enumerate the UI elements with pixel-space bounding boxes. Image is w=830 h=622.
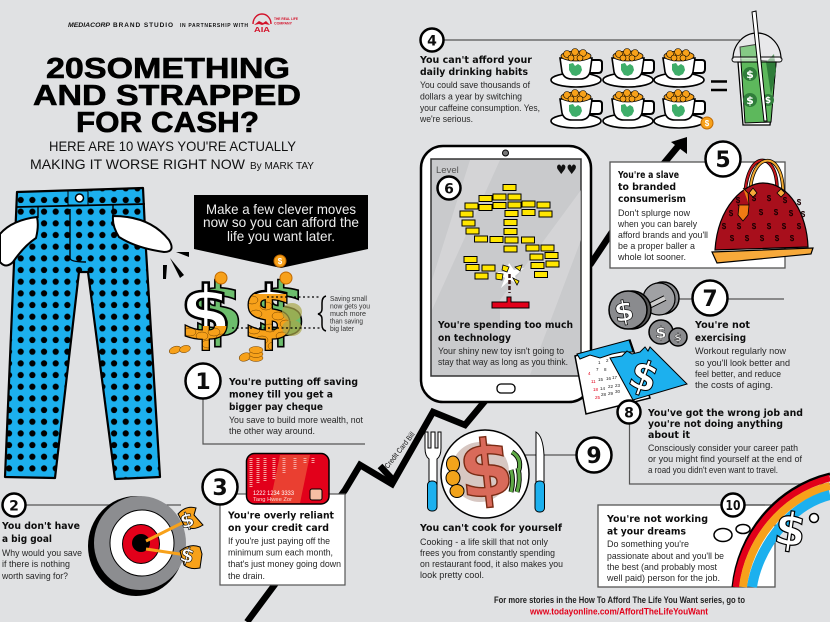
icon: dollar signs filling with coins bbox=[168, 268, 306, 363]
icon: calendar and torn dollar page: 18 bbox=[593, 387, 599, 392]
header: partner logos: COMPANY bbox=[274, 20, 292, 26]
panel: tip 5 branded consumerism: 5 bbox=[715, 148, 731, 173]
icon: dollar signs filling with coins: $ bbox=[255, 268, 306, 354]
panel: tip 5 branded consumerism: whole lot sooner. bbox=[617, 252, 686, 263]
panel: tip 1 saving bbox=[186, 364, 365, 444]
panel: tip 1 saving: You save to build more wealth, not bbox=[229, 415, 363, 426]
icon: dollar signs filling with coins: $ bbox=[192, 268, 244, 354]
panel: tip 3 credit card: You're overly reliant bbox=[227, 510, 334, 522]
icon: red credit card bbox=[246, 454, 329, 504]
icon: target with dollar darts bbox=[88, 496, 203, 596]
icon: red designer handbag: $ bbox=[774, 208, 779, 217]
icon: red credit card: Tang Hwee Zor bbox=[253, 497, 292, 503]
icon: calendar and torn dollar page: 28 bbox=[601, 392, 607, 397]
panel: tip 10 dreams: You're not working bbox=[606, 514, 708, 525]
panel: tip 5 branded consumerism: consumerism bbox=[618, 194, 686, 205]
icon: calendar and torn dollar page: 25 bbox=[595, 395, 601, 400]
icon: plate with dollar steak, fork and knife: $ bbox=[454, 422, 518, 518]
game: yellow bricks bbox=[460, 184, 559, 279]
panel: tip 7 exercising: the costs of aging. bbox=[695, 380, 773, 391]
panel: tip 3 credit card: that's just money going down bbox=[228, 559, 341, 570]
panel: tip 3 credit card: If you're just paying off the bbox=[228, 536, 330, 547]
panel: tip 7 exercising: so you'll look better and bbox=[695, 358, 790, 369]
subtitle and byline: By MARK TAY bbox=[250, 160, 314, 172]
icon: red designer handbag: $ bbox=[722, 222, 727, 231]
icon: calendar and torn dollar page: 22 bbox=[608, 384, 614, 389]
panel: tip 1 saving: 1 bbox=[195, 370, 211, 395]
icon: red designer handbag: $ bbox=[775, 234, 780, 243]
icon: calendar and torn dollar page: 17 bbox=[612, 375, 618, 380]
panel: tip 1 saving: bigger pay cheque bbox=[229, 402, 323, 413]
illustration: empty-pocket jeans bbox=[0, 188, 189, 479]
annotation: saving small bracket: big later bbox=[330, 326, 355, 333]
header: partner logos: THE REAL LIFE bbox=[274, 16, 298, 21]
footer: more stories link: For more stories in the How To Afford The Life You Want series, go to bbox=[494, 595, 745, 606]
subtitle and byline bbox=[30, 138, 314, 172]
icon: calendar and torn dollar page: 30 bbox=[615, 389, 621, 394]
panel: tip 9 cooking: on restaurant food, it also makes you bbox=[420, 559, 563, 570]
icon: red designer handbag: $ bbox=[752, 222, 757, 231]
panel: tip 7 exercising bbox=[609, 280, 790, 391]
panel: tip 4 drinking habits: 4 bbox=[427, 34, 437, 50]
panel: tip 7 exercising: 7 bbox=[702, 287, 718, 312]
icon: red designer handbag: $ bbox=[729, 209, 734, 218]
icon: dollar signs filling with coins: $ bbox=[180, 271, 232, 357]
panel: tip 1 saving: the other way around. bbox=[229, 426, 315, 437]
icon: red designer handbag: $ bbox=[801, 210, 806, 219]
panel: tip 4 drinking habits bbox=[419, 28, 740, 125]
icon: calendar and torn dollar page: 11 bbox=[591, 379, 596, 384]
panel: tip 3 credit card: minimum sum each month, bbox=[228, 548, 333, 558]
icon: calendar and torn dollar page: 29 bbox=[608, 391, 614, 396]
panel: tip 7 exercising: feel better, and reduce bbox=[695, 369, 781, 380]
panel: tip 6 tablet game: You're spending too much bbox=[437, 320, 573, 331]
label: credit card bill: Credit Card Bill bbox=[382, 430, 417, 470]
annotation: saving small bracket bbox=[232, 296, 370, 333]
icon: red designer handbag: $ bbox=[797, 198, 802, 207]
icon: calendar and torn dollar page: 14 bbox=[600, 386, 606, 391]
icon: six coffee cups full of coins bbox=[551, 48, 713, 129]
icon: red credit card: 1222 1234 3333 bbox=[253, 491, 295, 497]
panel: tip 3 credit card: on your credit card bbox=[228, 523, 329, 534]
icon: calendar and torn dollar page: 7 bbox=[596, 367, 599, 372]
panel: tip 6 tablet game: ♥♥ bbox=[556, 163, 577, 178]
callout: make a few clever moves: now so you can afford the bbox=[203, 214, 359, 230]
panel: tip 5 branded consumerism: You're a slave bbox=[617, 170, 679, 181]
panel: tip 7 exercising: You're not bbox=[694, 320, 750, 331]
icon: calendar and torn dollar page: 16 bbox=[606, 376, 612, 381]
icon: target with dollar darts: $ bbox=[177, 507, 197, 533]
equals sign bbox=[711, 82, 727, 90]
panel: tip 5 branded consumerism: afford brands and you'll bbox=[618, 230, 708, 241]
icon: red designer handbag: $ bbox=[737, 222, 742, 231]
panel: tip 9 cooking bbox=[419, 422, 612, 581]
icon: red designer handbag: $ bbox=[797, 222, 802, 231]
header: partner logos: AIA bbox=[254, 27, 270, 34]
icon: calendar and torn dollar page: 8 bbox=[604, 367, 607, 372]
panel: tip 4 drinking habits: we're serious. bbox=[419, 114, 473, 125]
icon: red designer handbag: $ bbox=[760, 234, 765, 243]
panel: tip 2 big goal: 2 bbox=[9, 498, 19, 514]
icon: calendar and torn dollar page: 2 bbox=[606, 358, 609, 363]
game: paddle and explosion bbox=[492, 263, 529, 308]
panel: tip 8 wrong job: about it bbox=[648, 430, 690, 441]
panel: tip 4 drinking habits: your caffeine consumption. Yes, bbox=[420, 103, 540, 114]
icon: six coffee cups full of coins: $ bbox=[705, 119, 710, 128]
icon: dumbbell with dollar coins: $ bbox=[674, 331, 682, 344]
panel: tip 5 branded consumerism bbox=[610, 142, 813, 268]
annotation: saving small bracket: much more bbox=[330, 311, 366, 318]
icon: falling coin bbox=[274, 255, 286, 267]
icon: red designer handbag: $ bbox=[767, 194, 772, 203]
panel: tip 3 credit card: 3 bbox=[212, 476, 228, 501]
footer: more stories link bbox=[494, 595, 745, 618]
panel: tip 9 cooking: Cooking - a life skill that not only bbox=[420, 537, 548, 548]
footer: more stories link: www.todayonline.com/AffordTheLifeYouWant bbox=[529, 606, 709, 618]
panel: tip 9 cooking: 9 bbox=[586, 444, 602, 469]
panel: tip 4 drinking habits: You can't afford your bbox=[419, 55, 532, 66]
annotation: saving small bracket: now gets you bbox=[330, 304, 370, 310]
header: partner logos bbox=[68, 14, 298, 34]
panel: tip 7 exercising: exercising bbox=[695, 333, 746, 344]
panel: tip 2 big goal: a big goal bbox=[2, 534, 52, 545]
panel: tip 3 credit card: the drain. bbox=[228, 571, 265, 582]
panel: tip 6 tablet game: Level bbox=[436, 165, 459, 176]
icon: red designer handbag: $ bbox=[736, 196, 741, 205]
icon: bubble tea cup full of cash: $ bbox=[746, 68, 754, 81]
icon: calendar and torn dollar page: 15 bbox=[598, 377, 604, 382]
icon: rainbow with dollar and clouds bbox=[714, 474, 830, 587]
panel: tip 4 drinking habits: You could save thousands of bbox=[420, 80, 530, 91]
icon: calendar and torn dollar page: 1 bbox=[598, 360, 601, 365]
panel: tip 6 tablet game: Your shiny new toy isn't going to bbox=[438, 346, 564, 357]
icon: red designer handbag: $ bbox=[730, 234, 735, 243]
icon: target with dollar darts: $ bbox=[177, 542, 197, 568]
zigzag debt line and arrow bbox=[247, 137, 687, 622]
header: partner logos: BRAND STUDIO bbox=[113, 22, 173, 29]
panel: tip 9 cooking: You can't cook for yourself bbox=[419, 523, 563, 534]
panel: tip 8 wrong job: you're not doing anything bbox=[648, 419, 783, 430]
icon: calendar and torn dollar page: 4 bbox=[588, 371, 591, 376]
panel: tip 6 tablet game: on technology bbox=[438, 333, 511, 344]
panel: tip 8 wrong job: You've got the wrong job and bbox=[647, 408, 803, 419]
panel: tip 8 wrong job: Consciously consider your career path bbox=[648, 443, 798, 454]
icon: dumbbell with dollar coins bbox=[609, 282, 687, 346]
panel: tip 3 credit card bbox=[202, 454, 345, 585]
callout: make a few clever moves: life you want later. bbox=[227, 228, 335, 244]
icon: calendar and torn dollar page: 23 bbox=[615, 383, 621, 388]
panel: tip 2 big goal: if there is nothing bbox=[2, 559, 70, 570]
icon: calendar and torn dollar page bbox=[575, 340, 687, 414]
annotation: saving small bracket: than saving bbox=[330, 318, 363, 326]
panel: tip 9 cooking: look pretty cool. bbox=[420, 570, 484, 581]
panel: tip 4 drinking habits: dollars a year by switching bbox=[420, 92, 522, 102]
icon: red designer handbag: $ bbox=[783, 196, 788, 205]
icon: red designer handbag: $ bbox=[759, 208, 764, 217]
icon: red designer handbag: $ bbox=[745, 234, 750, 243]
icon: dumbbell with dollar coins: $ bbox=[611, 294, 636, 329]
panel: tip 10 dreams bbox=[598, 474, 830, 587]
icon: bubble tea cup full of cash bbox=[732, 11, 782, 125]
panel: tip 5 branded consumerism: to branded bbox=[618, 182, 676, 193]
panel: tip 5 branded consumerism: when you can barely bbox=[617, 219, 697, 230]
callout: make a few clever moves bbox=[194, 195, 368, 268]
panel: tip 10 dreams: at your dreams bbox=[607, 526, 686, 538]
icon: red designer handbag: $ bbox=[744, 208, 749, 217]
icon: red designer handbag: $ bbox=[752, 194, 757, 203]
subtitle and byline: MAKING IT WORSE RIGHT NOW bbox=[30, 156, 246, 172]
panel: tip 7 exercising: Workout regularly now bbox=[695, 346, 786, 357]
panel: tip 10 dreams: Do something you're bbox=[607, 539, 689, 550]
callout: make a few clever moves: Make a few clever moves bbox=[206, 201, 356, 217]
icon: plate with dollar steak, fork and knife bbox=[425, 422, 544, 518]
icon: dollar signs filling with coins: $ bbox=[243, 271, 294, 357]
panel: tip 8 wrong job bbox=[618, 400, 830, 484]
subtitle and byline: HERE ARE 10 WAYS YOU'RE ACTUALLY bbox=[49, 138, 297, 154]
panel: tip 6 tablet game: stay that way as long as you think. bbox=[438, 357, 568, 368]
icon: calendar and torn dollar page: $ bbox=[623, 351, 665, 403]
panel: tip 2 big goal: worth saving for? bbox=[1, 571, 68, 582]
panel: tip 10 dreams: passionate about and you'll be bbox=[607, 551, 724, 562]
icon: bubble tea cup full of cash: $ bbox=[765, 96, 771, 106]
title bbox=[33, 53, 301, 139]
panel: tip 5 branded consumerism: be a proper baller a bbox=[618, 241, 696, 252]
panel: tip 10 dreams: 10 bbox=[726, 499, 740, 514]
icon: red designer handbag: $ bbox=[789, 209, 794, 218]
icon: red designer handbag: $ bbox=[782, 222, 787, 231]
panel: tip 5 branded consumerism: Don't splurge now bbox=[618, 208, 690, 219]
icon: red designer handbag: $ bbox=[767, 222, 772, 231]
annotation: saving small bracket: Saving small bbox=[330, 296, 367, 303]
panel: tip 2 big goal: Why would you save bbox=[2, 548, 82, 559]
title: 20SOMETHING bbox=[46, 53, 290, 85]
panel: tip 4 drinking habits: daily drinking habits bbox=[420, 67, 528, 78]
icon: rainbow with dollar and clouds: $ bbox=[771, 501, 810, 558]
title: FOR CASH? bbox=[76, 107, 259, 139]
panel: tip 2 big goal: You don't have bbox=[1, 521, 80, 532]
icon: red designer handbag bbox=[712, 160, 813, 263]
title: AND STRAPPED bbox=[33, 80, 301, 112]
panel: tip 8 wrong job: 8 bbox=[624, 406, 634, 422]
icon: falling coin: $ bbox=[278, 257, 283, 266]
panel: tip 8 wrong job: or you might find yourself at the end of bbox=[648, 454, 802, 465]
panel: tip 1 saving: You're putting off saving bbox=[228, 377, 358, 388]
panel: tip 10 dreams: the best (and probably most bbox=[607, 562, 717, 573]
panel: tip 9 cooking: frees you from constantly spending bbox=[420, 548, 555, 559]
icon: dumbbell with dollar coins: $ bbox=[655, 323, 667, 342]
icon: red designer handbag: $ bbox=[790, 234, 795, 243]
header: partner logos: MEDIACORP bbox=[68, 22, 111, 29]
panel: tip 6 tablet game: 6 bbox=[444, 182, 454, 198]
header: partner logos: IN PARTNERSHIP WITH bbox=[180, 23, 248, 29]
panel: tip 6 tablet game bbox=[421, 146, 591, 402]
panel: tip 10 dreams: well paid) person for the job. bbox=[606, 573, 720, 584]
panel: tip 1 saving: money till you get a bbox=[229, 390, 333, 400]
panel: tip 8 wrong job: a road you didn't even want to travel. bbox=[648, 465, 778, 476]
panel: tip 2 big goal bbox=[1, 494, 181, 582]
icon: bubble tea cup full of cash: $ bbox=[746, 94, 754, 107]
